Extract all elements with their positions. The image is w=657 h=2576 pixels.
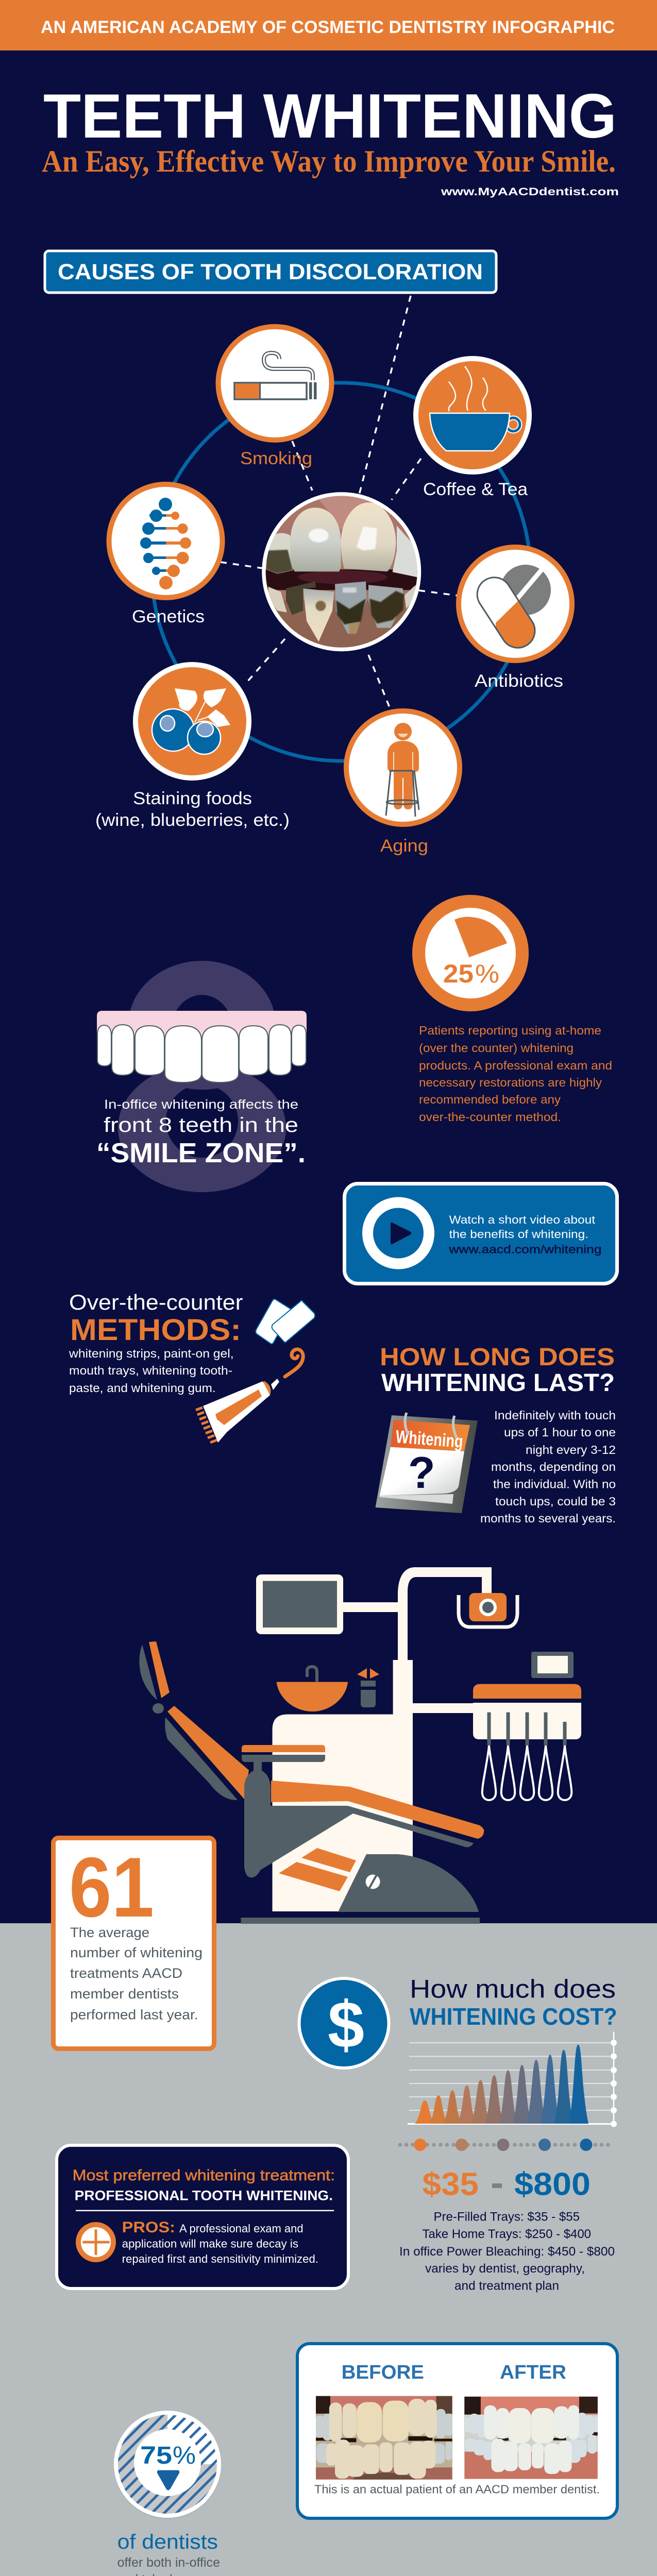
top banner (0, 0, 657, 50)
teeth illustration (97, 1011, 307, 1082)
heading: HOW LONG DOES (380, 1344, 615, 1371)
whitening cost panel (299, 1974, 617, 2293)
panel: most preferred treatment: Most preferred whitening treatment: (73, 2167, 335, 2184)
text: patients reporting: Patients reporting using at-home (419, 1024, 601, 1037)
title: TEETH WHITENING (43, 81, 617, 151)
stat panel: 61 treatments: performed last year. (70, 2007, 198, 2023)
chair seat (271, 1781, 484, 1839)
text: of dentists: of dentists (117, 2531, 218, 2553)
stat panel: 61 treatments: treatments AACD (70, 1965, 182, 1981)
text: patients reporting: necessary restorations are highly (419, 1076, 602, 1089)
panel: before and after: This is an actual patient of an AACD member dentist. (314, 2482, 600, 2496)
grey background (0, 1923, 657, 2576)
circle: antibiotics icon (459, 547, 572, 660)
dot scale (398, 2139, 610, 2151)
monitor (256, 1574, 400, 1634)
chair pedals (279, 1848, 356, 1891)
heading (410, 1974, 617, 2030)
text: duration: months, depending on (491, 1460, 616, 1473)
list text (69, 1347, 234, 1395)
list text: whitening strips, paint-on gel, (69, 1347, 234, 1360)
price range: $35 (423, 2167, 479, 2202)
smile zone text: “SMILE ZONE”. (96, 1138, 306, 1168)
stat panel: 61 treatments (54, 1838, 214, 2048)
smile zone text: In-office whitening affects the (104, 1097, 298, 1112)
pie icon: 25 (443, 959, 474, 988)
price details: and treatment plan (454, 2279, 559, 2293)
photo: before (316, 2396, 452, 2488)
icon: calendar (375, 1413, 478, 1513)
stat panel: 61 treatments: The average (70, 1925, 149, 1940)
stat panel: 61 treatments: member dentists (70, 1986, 179, 2002)
price details: In office Power Bleaching: $450 - $800 (399, 2245, 615, 2259)
label: antibiotics: Antibiotics (475, 671, 563, 691)
stat panel: 61 treatments: 61 (69, 1840, 154, 1935)
chair frame (244, 1770, 474, 1877)
subtitle: An Easy, Effective Way to Improve Your Smile. (42, 144, 616, 178)
stat: 75 percent of dentists (114, 2412, 227, 2576)
dental chair illustration (139, 1567, 581, 1924)
circle: smoking icon (218, 327, 332, 440)
icon: plus (78, 2225, 113, 2260)
circle: genetics icon (109, 484, 223, 598)
label: staining foods: (wine, blueberries, etc.) (95, 810, 290, 830)
text: description: offer both in-office (117, 2555, 220, 2570)
icon: calendar: Whitening (395, 1427, 464, 1452)
heading: causes of tooth discoloration (45, 251, 496, 293)
how long does whitening last (375, 1344, 616, 1525)
chair back (139, 1641, 249, 1800)
text: duration (480, 1409, 616, 1525)
panel: most preferred treatment: repaired first and sensitivity minimized. (122, 2252, 318, 2265)
icon: toothpaste tube (196, 1349, 303, 1443)
stat: 25 percent (418, 902, 612, 1124)
icon: 75 percent dial: 75 (140, 2442, 172, 2469)
pie icon: % (475, 959, 499, 988)
icon: 75 percent dial: % (173, 2442, 196, 2469)
blue connecting ring (152, 383, 530, 761)
heading (380, 1344, 615, 1397)
label: staining foods (95, 789, 290, 830)
price details: Take Home Trays: $250 - $400 (423, 2227, 591, 2241)
label: coffee and tea: Coffee & Tea (423, 480, 528, 499)
text: duration: ups of 1 hour to one (504, 1426, 616, 1439)
heading: How much does (410, 1974, 616, 2003)
panel: most preferred treatment: A professional exam and (179, 2222, 304, 2235)
text: patients reporting: (over the counter) whitening (419, 1041, 574, 1055)
text: duration: the individual. With no (493, 1478, 616, 1491)
lamp arm (398, 1567, 492, 1664)
price range: $800 (514, 2167, 591, 2202)
heading: Over-the-counter (69, 1290, 243, 1314)
smile zone text: front 8 teeth in the (104, 1114, 298, 1137)
heading: causes of tooth discoloration: CAUSES OF TOOTH DISCOLORATION (58, 260, 483, 284)
heading: METHODS: (70, 1313, 241, 1347)
bar chart (408, 2032, 617, 2127)
price details (399, 2210, 615, 2293)
list text: mouth trays, whitening tooth- (69, 1364, 232, 1377)
photo: stained teeth (260, 490, 423, 653)
text: duration: touch ups, could be 3 (495, 1495, 616, 1508)
heading: WHITENING LAST? (381, 1369, 615, 1397)
navy background (0, 0, 657, 1924)
cream column (272, 1660, 413, 1911)
icon: play button (368, 1202, 429, 1264)
chair base (338, 1854, 479, 1912)
icon: dollar: $ (328, 1988, 364, 2062)
circle: aging icon (346, 711, 460, 824)
top banner: AN AMERICAN ACADEMY OF COSMETIC DENTISTRY INFOGRAPHIC (41, 18, 615, 37)
panel: most preferred treatment: PROFESSIONAL TOOTH WHITENING. (75, 2188, 333, 2203)
photo: after (464, 2397, 598, 2479)
rinse cup (357, 1668, 379, 1707)
big number 8 (118, 961, 286, 1192)
price range (423, 2167, 591, 2202)
text: duration: months to several years. (480, 1512, 616, 1525)
icon: calendar: ? (408, 1448, 435, 1498)
circle: staining foods icon (136, 665, 249, 778)
text: patients reporting: recommended before any (419, 1093, 561, 1106)
sink (277, 1667, 348, 1711)
panel: before and after (297, 2344, 617, 2518)
video callout: the benefits of whitening. (449, 1228, 588, 1241)
label: aging: Aging (380, 836, 428, 856)
text: duration: night every 3-12 (526, 1443, 616, 1456)
price details: varies by dentist, geography, (425, 2262, 585, 2276)
website url: www.MyAACDdentist.com (441, 186, 619, 198)
panel: before and after: AFTER (500, 2362, 566, 2383)
panel: before and after: BEFORE (342, 2362, 424, 2383)
text: patients reporting: products. A professional exam and (419, 1059, 612, 1072)
smile zone panel (96, 961, 307, 1192)
icon: 75 percent dial (114, 2412, 221, 2519)
dashed connectors (221, 296, 458, 710)
circle: coffee and tea icon (416, 359, 529, 472)
label: genetics: Genetics (132, 607, 205, 626)
text: patients reporting: over-the-counter method. (419, 1110, 561, 1124)
panel: most preferred treatment: PROS: (122, 2219, 175, 2236)
icon: whitening strips (256, 1299, 315, 1344)
label: smoking: Smoking (240, 449, 312, 468)
label: staining foods: Staining foods (133, 789, 252, 808)
price details: Pre-Filled Trays: $35 - $55 (434, 2210, 580, 2224)
floor slab (241, 1918, 480, 1924)
instrument tray (413, 1652, 581, 1739)
instruments (482, 1713, 571, 1800)
stat panel: 61 treatments: number of whitening (70, 1945, 203, 1960)
pie icon (418, 902, 523, 1005)
icon: dollar (299, 1978, 389, 2068)
lamp (459, 1593, 517, 1627)
causes diagram (95, 296, 572, 856)
panel: most preferred treatment (57, 2145, 348, 2289)
heading (69, 1290, 243, 1347)
heading: WHITENING COST? (410, 2003, 617, 2030)
text: description (117, 2555, 227, 2576)
over-the-counter methods (69, 1290, 315, 1443)
smile zone text (96, 1097, 306, 1168)
list text: paste, and whitening gum. (69, 1381, 216, 1395)
video callout: www.aacd.com/whitening (448, 1243, 602, 1256)
video callout: Watch a short video about (449, 1213, 595, 1226)
panel: most preferred treatment: application will make sure decay is (122, 2237, 298, 2250)
headrest (242, 1745, 325, 1773)
text: patients reporting (419, 1024, 612, 1124)
text: duration: Indefinitely with touch (494, 1409, 616, 1422)
video callout (344, 1184, 617, 1284)
